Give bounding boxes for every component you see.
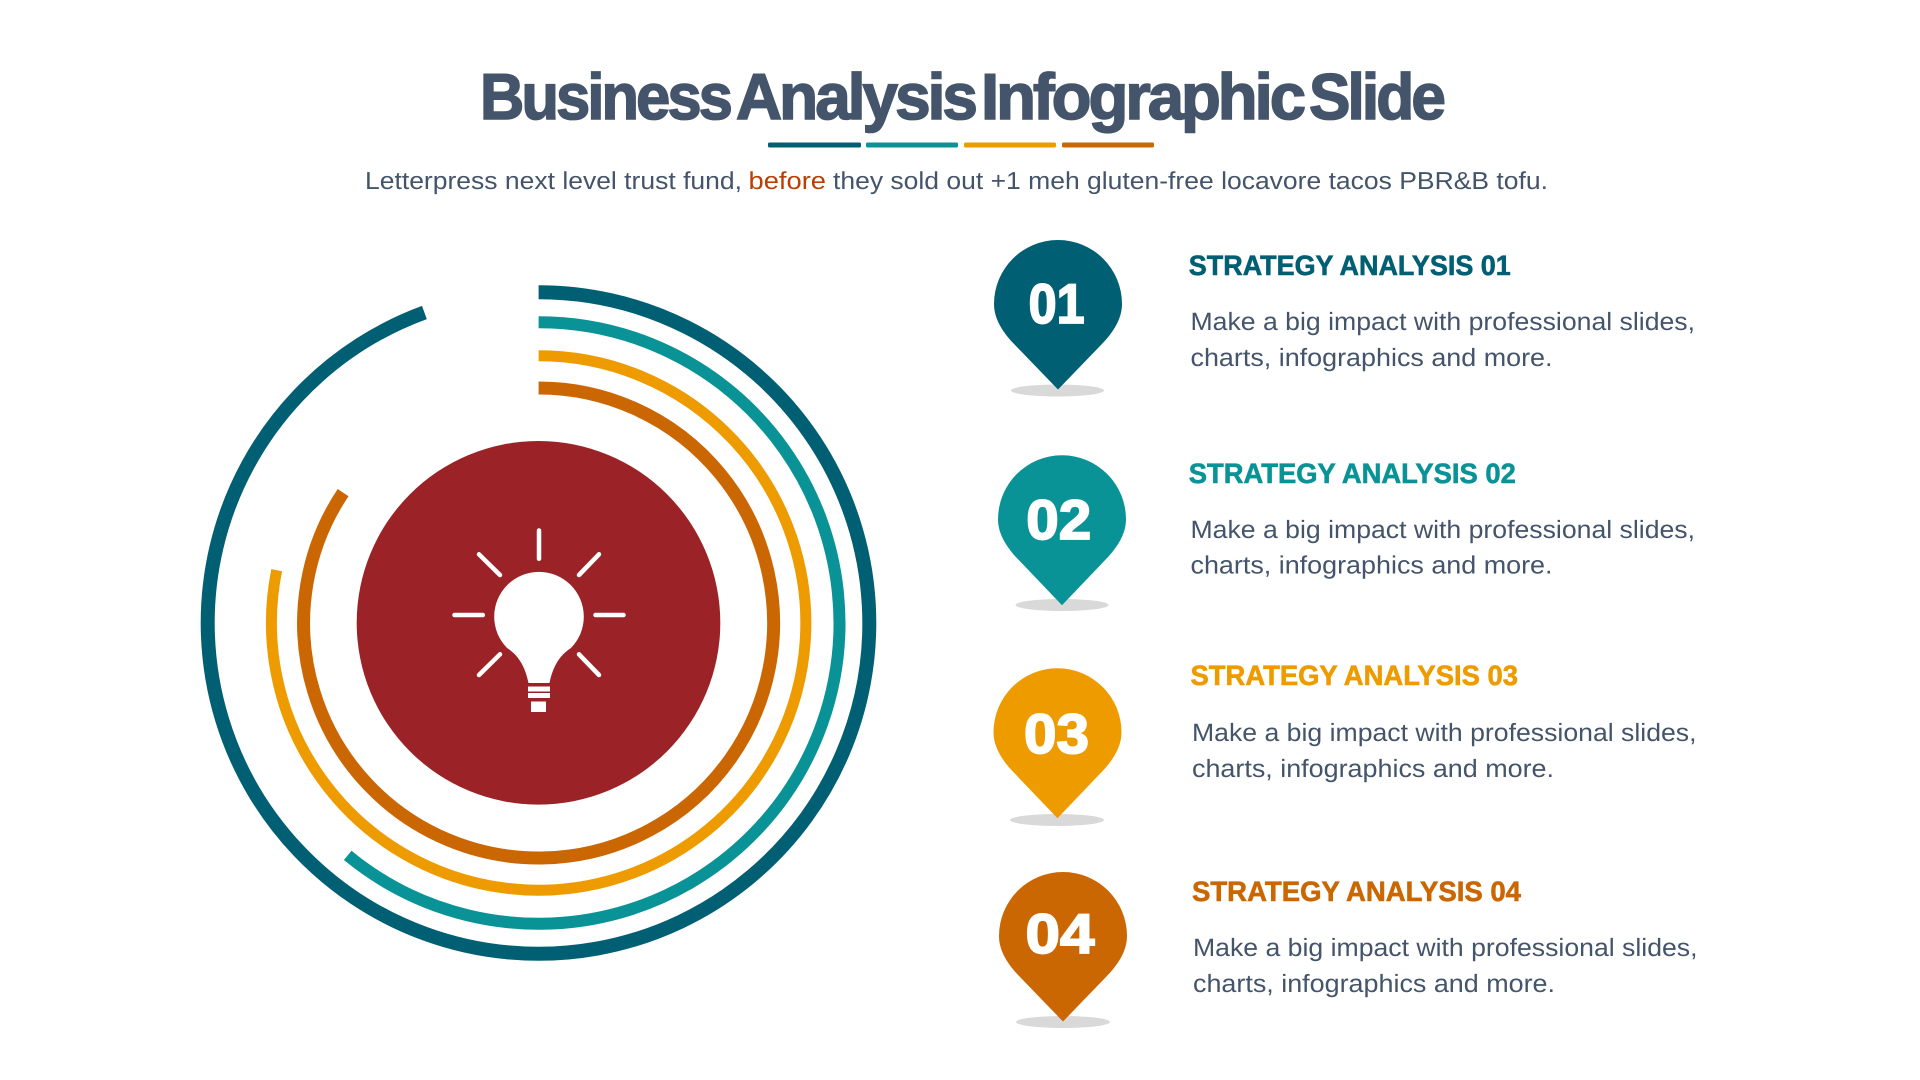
- description 03: [1192, 719, 1696, 783]
- icon: light bulb: [454, 530, 624, 712]
- pin 02: 02: [1026, 488, 1091, 551]
- concentric ring chart with light bulb: [208, 292, 869, 954]
- ring 3: amber arc: [271, 356, 806, 890]
- description 03: Make a big impact with professional slides,: [1192, 719, 1696, 747]
- title: [480, 60, 1444, 133]
- heading 04: STRATEGY ANALYSIS 04: [1192, 876, 1521, 907]
- subtitle: before: [748, 168, 826, 195]
- title: Business: [480, 60, 731, 133]
- centre circle: [357, 441, 720, 805]
- description 01: [1190, 308, 1695, 372]
- item 1: strategy analysis 01: [994, 240, 1695, 396]
- pin 03: 03: [1024, 702, 1089, 765]
- subtitle: Letterpress next level trust fund,: [365, 168, 742, 195]
- heading 03: STRATEGY ANALYSIS 03: [1190, 660, 1518, 691]
- pin 01: [994, 240, 1122, 396]
- description 02: charts, infographics and more.: [1190, 552, 1552, 580]
- description 02: Make a big impact with professional slides,: [1190, 516, 1695, 544]
- heading 02: STRATEGY ANALYSIS 02: [1189, 458, 1516, 489]
- item 4: strategy analysis 04: [999, 872, 1698, 1028]
- title: Slide: [1309, 60, 1444, 133]
- pin 01: 01: [1029, 272, 1085, 335]
- pin 02: [998, 455, 1126, 611]
- pin 04: [999, 872, 1127, 1028]
- subtitle: they sold out +1 meh gluten-free locavore tacos PBR&B tofu.: [833, 168, 1548, 195]
- pin 04: 04: [1026, 902, 1094, 965]
- ring 2: teal arc: [348, 322, 839, 924]
- ring 1: dark teal arc: [208, 292, 869, 954]
- description 03: charts, infographics and more.: [1192, 755, 1554, 783]
- description 01: charts, infographics and more.: [1190, 344, 1552, 372]
- heading 01: STRATEGY ANALYSIS 01: [1189, 250, 1511, 281]
- item 3: strategy analysis 03: [994, 660, 1696, 826]
- item 2: strategy analysis 02: [998, 455, 1695, 611]
- description 04: charts, infographics and more.: [1193, 970, 1555, 998]
- title: Infographic: [981, 60, 1305, 133]
- pin 03: [994, 668, 1122, 826]
- subtitle: [365, 168, 1548, 195]
- description 02: [1190, 516, 1695, 580]
- description 01: Make a big impact with professional slides,: [1190, 308, 1695, 336]
- description 04: [1193, 934, 1698, 998]
- description 04: Make a big impact with professional slides,: [1193, 934, 1698, 962]
- title: Analysis: [736, 60, 976, 133]
- title underline: four colour bars: [768, 142, 1154, 148]
- ring 4: orange arc: [304, 388, 774, 858]
